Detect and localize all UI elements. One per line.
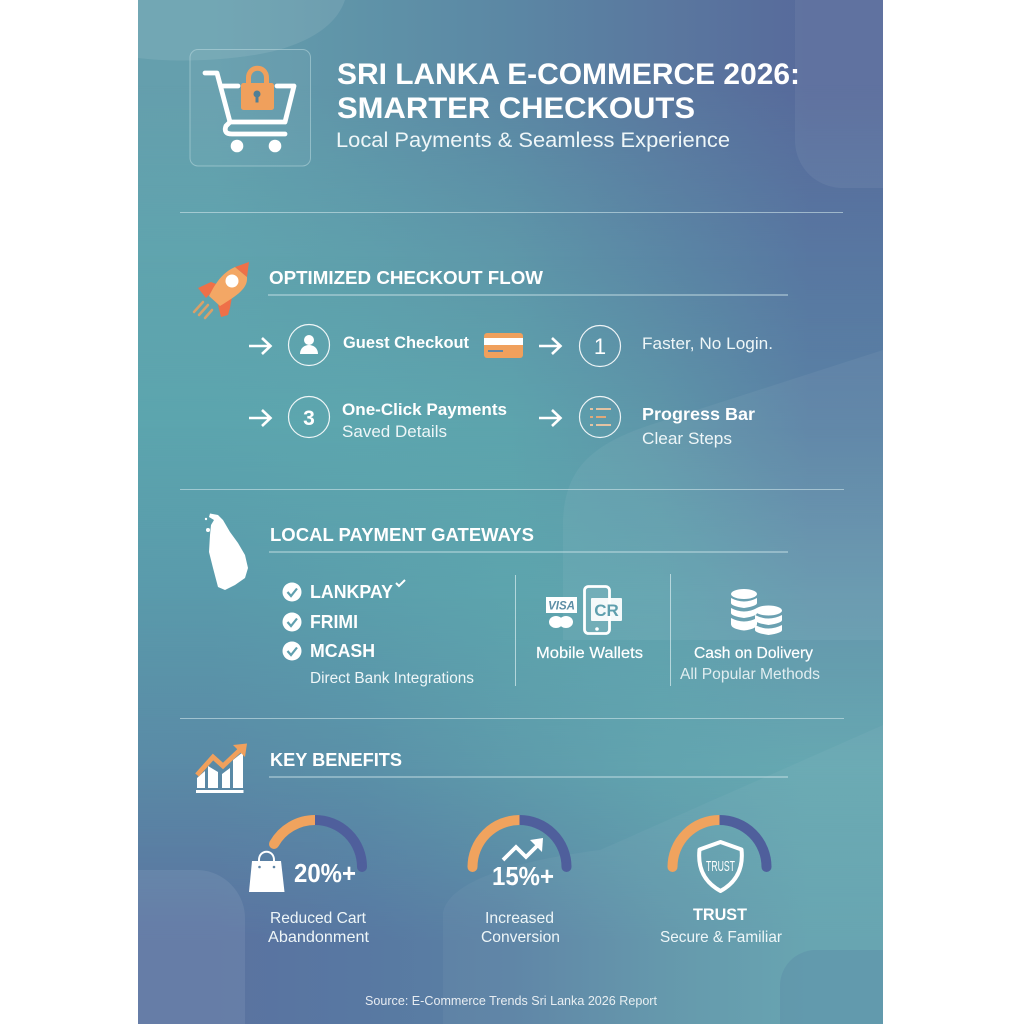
benefit: reduced cart abandonment: 20%+: [294, 860, 356, 888]
benefit: trust: TRUST: [693, 905, 748, 924]
title: SRI LANKA E-COMMERCE 2026:: [337, 58, 800, 91]
gateway list: LANKPAY: [310, 582, 393, 602]
source note: Source: E-Commerce Trends Sri Lanka 2026 Report: [365, 994, 658, 1008]
cash on delivery: All Popular Methods: [680, 666, 820, 683]
icon: growth chart: [196, 744, 247, 793]
benefit: increased conversion: [468, 820, 572, 946]
benefit: reduced cart abandonment: Abandonment: [268, 929, 370, 946]
step: one-click payments: Saved Details: [342, 423, 447, 441]
step: progress bar: Clear Steps: [642, 430, 732, 448]
heading: key benefits: KEY BENEFITS: [270, 750, 402, 770]
benefit: reduced cart abandonment: Reduced Cart: [270, 910, 367, 927]
benefit: increased conversion: Increased: [485, 910, 554, 927]
step: one-click payments: One-Click Payments: [342, 401, 507, 419]
step: faster no login: [539, 326, 773, 366]
background panel: [138, 0, 883, 1024]
step: guest checkout: Guest Checkout: [343, 334, 469, 352]
step: guest checkout: [249, 324, 469, 366]
mobile wallets: [536, 586, 643, 662]
step: faster no login: Faster, No Login.: [642, 335, 773, 353]
cash on delivery: [680, 589, 820, 683]
step: one-click payments: 3: [303, 407, 315, 430]
step: progress bar: [539, 396, 755, 448]
benefit: reduced cart abandonment: [249, 820, 370, 946]
benefit: trust: Secure & Familiar: [660, 929, 783, 946]
gateway list: [282, 580, 474, 687]
heading: local payment gateways: LOCAL PAYMENT GATEWAYS: [270, 525, 534, 545]
gateway list: FRIMI: [310, 612, 358, 632]
title: SMARTER CHECKOUTS: [337, 92, 695, 125]
gateway list: Direct Bank Integrations: [310, 670, 474, 687]
mobile wallets: VISA: [548, 600, 575, 612]
benefit: trust: [660, 820, 783, 946]
icon: rocket: [194, 262, 249, 318]
heading: optimized checkout flow: OPTIMIZED CHECKOUT FLOW: [269, 268, 543, 288]
step: one-click payments: [249, 396, 507, 441]
mobile wallets: Mobile Wallets: [536, 645, 643, 662]
step: progress bar: Progress Bar: [642, 404, 755, 424]
header icon: cart with lock: [190, 50, 310, 166]
icon: credit card: [484, 333, 523, 358]
cash on delivery: Cash on Dolivery: [694, 645, 813, 662]
mobile wallets: CR: [594, 601, 619, 620]
subtitle: Local Payments & Seamless Experience: [336, 128, 730, 152]
benefit: trust: TRUST: [706, 858, 735, 875]
title: [337, 58, 800, 125]
icon: sri lanka map: [205, 514, 248, 590]
step: faster no login: 1: [594, 334, 606, 359]
benefit: increased conversion: 15%+: [492, 863, 554, 891]
benefit: increased conversion: Conversion: [481, 929, 560, 946]
gateway list: MCASH: [310, 641, 375, 661]
